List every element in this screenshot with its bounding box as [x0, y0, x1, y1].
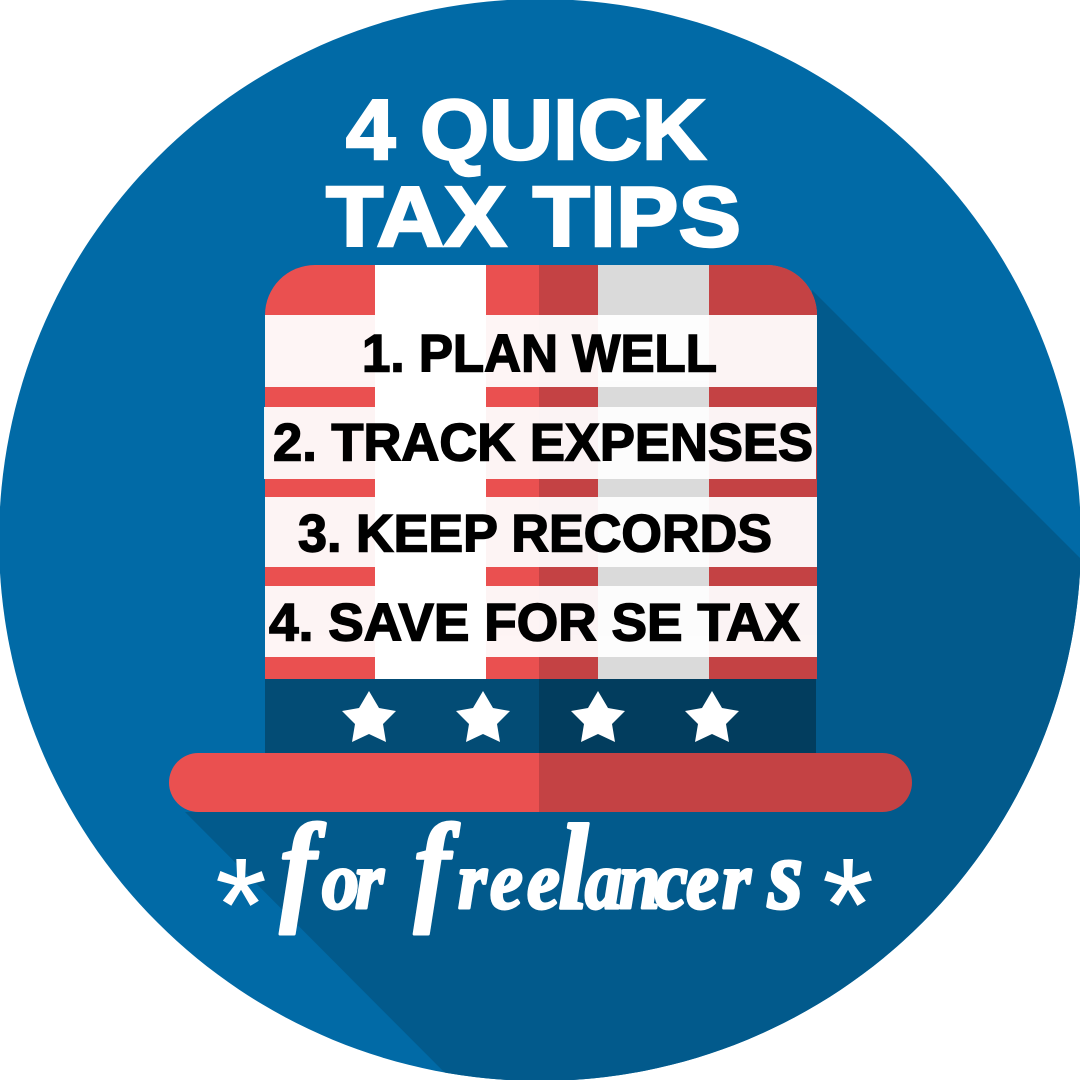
script text: r	[355, 834, 384, 926]
script text: a	[585, 834, 622, 926]
tip 2: 2. TRACK EXPENSES	[273, 414, 813, 472]
tips list	[269, 324, 813, 652]
script text: f	[414, 801, 460, 935]
tip 4: 4. SAVE FOR SE TAX	[269, 594, 800, 652]
white stripe	[375, 265, 486, 679]
script text: e	[686, 834, 719, 926]
hat crown red base	[265, 265, 817, 679]
tip 1: 1. PLAN WELL	[362, 324, 717, 384]
tip 3: 3. KEEP RECORDS	[298, 504, 772, 564]
script text: o	[322, 834, 359, 926]
script text: r	[458, 834, 487, 926]
title	[326, 83, 741, 265]
script text: r	[722, 834, 751, 926]
top hat	[169, 265, 912, 812]
script text: f	[280, 801, 326, 935]
script text: c	[655, 834, 688, 926]
title: 4 QUICK	[346, 83, 706, 178]
script text: l	[558, 801, 589, 935]
text bands	[264, 315, 817, 657]
navy hat band	[265, 679, 539, 753]
subtitle: for freelancers	[216, 801, 873, 977]
title: TAX TIPS	[326, 170, 741, 265]
script text: e	[527, 834, 560, 926]
navy hat band shaded	[539, 679, 816, 753]
left asterisk: *	[216, 831, 266, 977]
hat crown shaded right half	[539, 265, 817, 679]
script text: s	[767, 819, 803, 930]
stars	[342, 691, 739, 742]
right asterisk: *	[823, 831, 873, 977]
script text: e	[490, 834, 523, 926]
grey stripe	[598, 265, 709, 679]
hat brim	[169, 753, 912, 812]
script text: n	[619, 834, 660, 926]
